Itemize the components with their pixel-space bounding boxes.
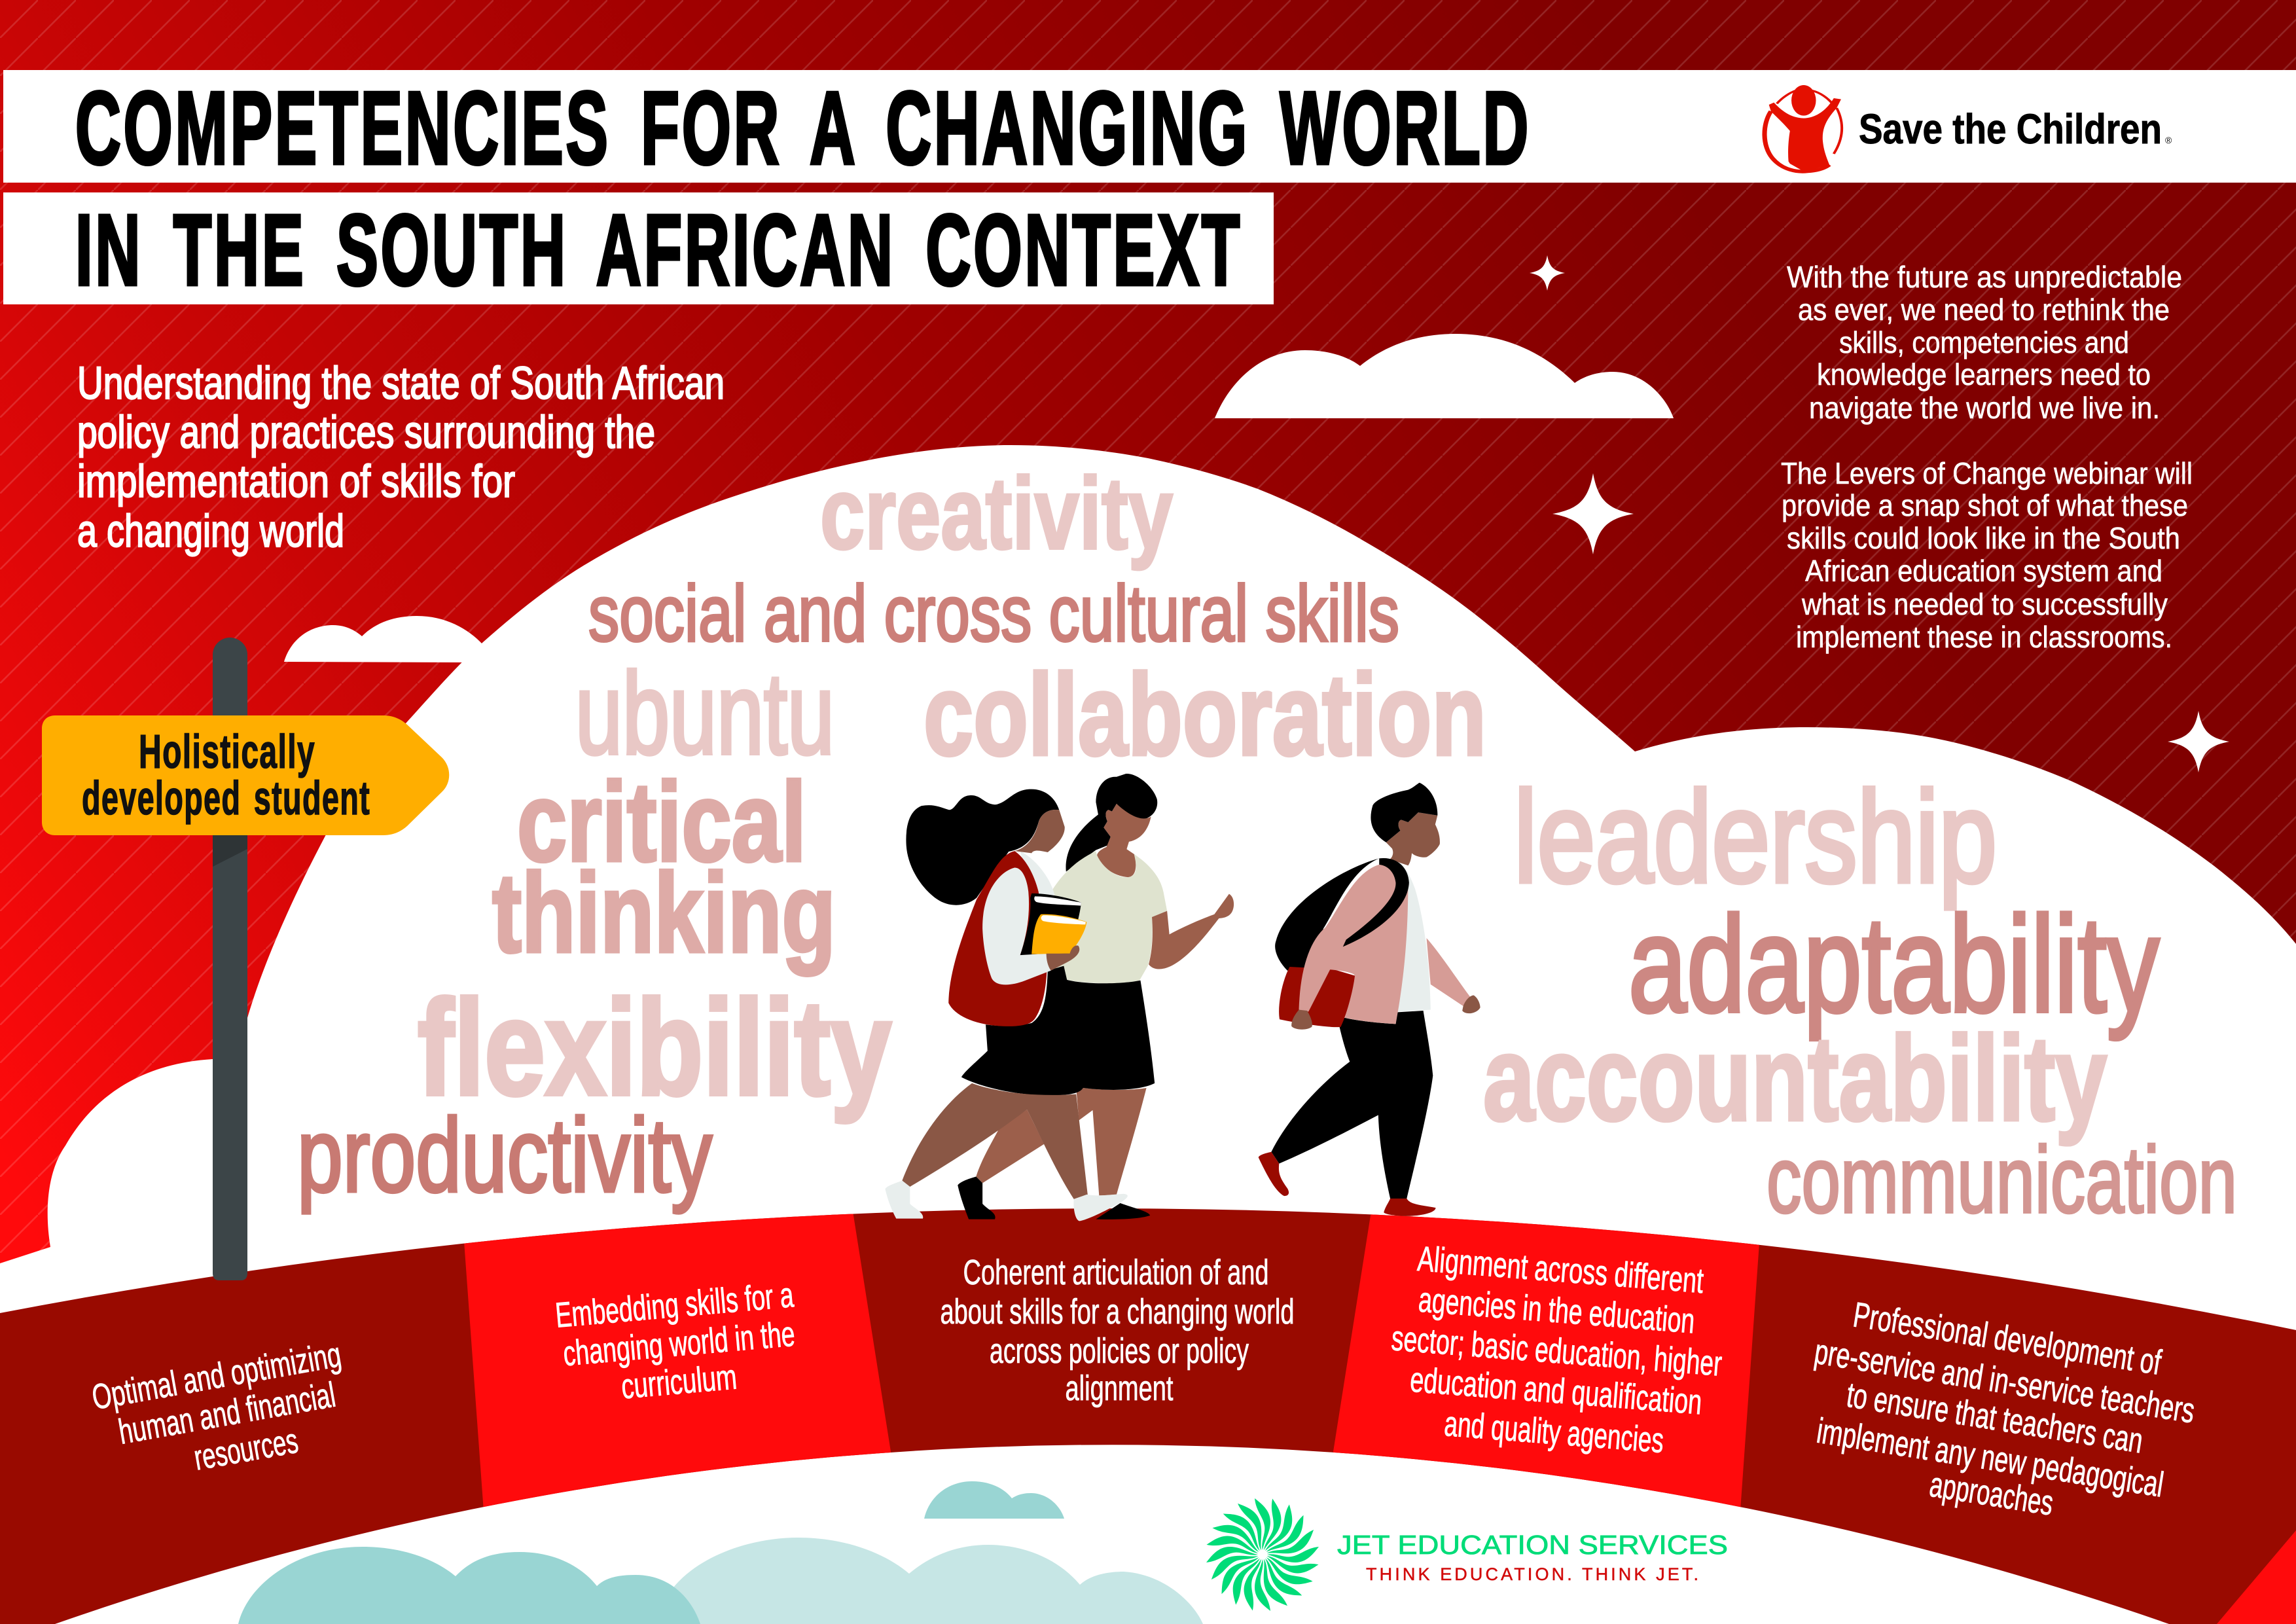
sign text line one: Holistically — [139, 726, 315, 778]
band text 1 — [89, 1335, 344, 1478]
band text 4: Alignment across different — [1416, 1239, 1705, 1301]
band text 2 — [554, 1275, 797, 1407]
JET wordmark: JET EDUCATION SERVICES — [1337, 1530, 1728, 1560]
intro text block: what is needed to successfully — [1801, 587, 2168, 621]
band text 5 — [1812, 1295, 2197, 1523]
band text 5: approaches — [1927, 1465, 2056, 1523]
figure: boy with backpack — [1259, 783, 1480, 1216]
word: social and cross cultural skills: social and cross cultural skills — [588, 569, 1399, 658]
curved band: five levers — [0, 1178, 2296, 1624]
signpost pole — [213, 638, 247, 1280]
skirts — [961, 966, 1155, 1096]
band text 4 — [1390, 1239, 1723, 1460]
intro text block: skills could look like in the South — [1787, 521, 2180, 555]
cloud: small left — [284, 616, 483, 662]
intro text block — [1781, 260, 2193, 654]
band text 3: about skills for a changing world — [940, 1292, 1295, 1331]
sign: holistically developed student — [42, 715, 449, 835]
band text 3 — [940, 1253, 1295, 1408]
word: collaboration: collaboration — [924, 650, 1486, 780]
intro text block: implement these in classrooms. — [1796, 620, 2172, 654]
cloud: small teal — [924, 1481, 1064, 1519]
subtitle — [77, 357, 725, 556]
title bar line two — [3, 192, 1274, 304]
word cloud — [297, 457, 2237, 1233]
intro text block: The Levers of Change webinar will — [1781, 456, 2193, 490]
illustration: students walking — [885, 774, 1480, 1221]
logo wordmark: Save the Children — [1859, 105, 2162, 153]
cloud: top centre — [1215, 334, 1674, 418]
icon: JET sunburst — [1206, 1498, 1319, 1611]
band text 1: human and financial — [116, 1375, 338, 1452]
subtitle: a changing world — [77, 505, 344, 556]
figure: student with long hair — [885, 789, 1128, 1221]
white hill background — [0, 445, 2296, 1624]
band text 4: and quality agencies — [1443, 1404, 1665, 1460]
intro text block: knowledge learners need to — [1817, 357, 2151, 391]
subtitle: policy and practices surrounding the — [77, 406, 655, 458]
registered mark: ® — [2165, 135, 2172, 145]
intro text block: provide a snap shot of what these — [1782, 488, 2188, 522]
JET tagline: THINK EDUCATION. THINK JET. — [1366, 1564, 1698, 1584]
band text 1: Optimal and optimizing — [89, 1335, 344, 1417]
band text 2: Embedding skills for a — [554, 1275, 796, 1335]
star small — [1530, 255, 1565, 291]
word: flexibility: flexibility — [418, 972, 891, 1123]
word: critical: critical — [517, 759, 806, 885]
intro text block: navigate the world we live in. — [1809, 391, 2160, 425]
title line two: IN THE SOUTH AFRICAN CONTEXT — [75, 194, 1242, 306]
intro text block: skills, competencies and — [1839, 325, 2129, 359]
star right — [2168, 711, 2229, 772]
word: leadership: leadership — [1514, 765, 1997, 909]
figure: student with ponytail — [958, 774, 1234, 1219]
band segment two — [464, 1214, 891, 1507]
band text 2: changing world in the — [562, 1314, 797, 1373]
sign text line two: developed student — [82, 772, 370, 825]
subtitle: Understanding the state of South African — [77, 357, 725, 408]
word: thinking: thinking — [492, 850, 836, 976]
band segment four — [1333, 1214, 1759, 1507]
band text 3: alignment — [1066, 1369, 1173, 1408]
band text 3: across policies or policy — [990, 1331, 1249, 1371]
band base — [0, 1208, 2296, 1624]
sign shadow — [213, 831, 247, 867]
intro text block: With the future as unpredictable — [1787, 260, 2182, 294]
intro text block: as ever, we need to rethink the — [1798, 293, 2170, 327]
corner segment — [2217, 1530, 2296, 1624]
band text 4: sector; basic education, higher — [1390, 1318, 1723, 1384]
band text 4: education and qualification — [1408, 1360, 1704, 1422]
logo: Save the Children — [1765, 85, 2172, 172]
subtitle: implementation of skills for — [77, 456, 515, 507]
logo: JET Education Services — [1206, 1498, 1728, 1611]
cloud: pale teal bottom — [655, 1538, 1203, 1624]
band text 4: agencies in the education — [1417, 1280, 1696, 1341]
star medium — [1552, 473, 1634, 554]
word: accountability: accountability — [1483, 1011, 2107, 1146]
band text 3: Coherent articulation of and — [963, 1253, 1268, 1292]
intro text block: African education system and — [1805, 554, 2162, 588]
band text 1: resources — [191, 1421, 301, 1478]
title bar line one — [3, 70, 2296, 183]
word: ubuntu: ubuntu — [575, 649, 834, 778]
band text 5: Professional development of — [1851, 1295, 2164, 1382]
band text 2: curriculum — [620, 1357, 738, 1407]
band text 5: to ensure that teachers can — [1844, 1375, 2145, 1461]
cloud: teal bottom — [238, 1547, 700, 1624]
icon: Save the Children emblem — [1765, 85, 1842, 172]
word: productivity: productivity — [297, 1096, 712, 1214]
word: creativity: creativity — [820, 457, 1173, 571]
